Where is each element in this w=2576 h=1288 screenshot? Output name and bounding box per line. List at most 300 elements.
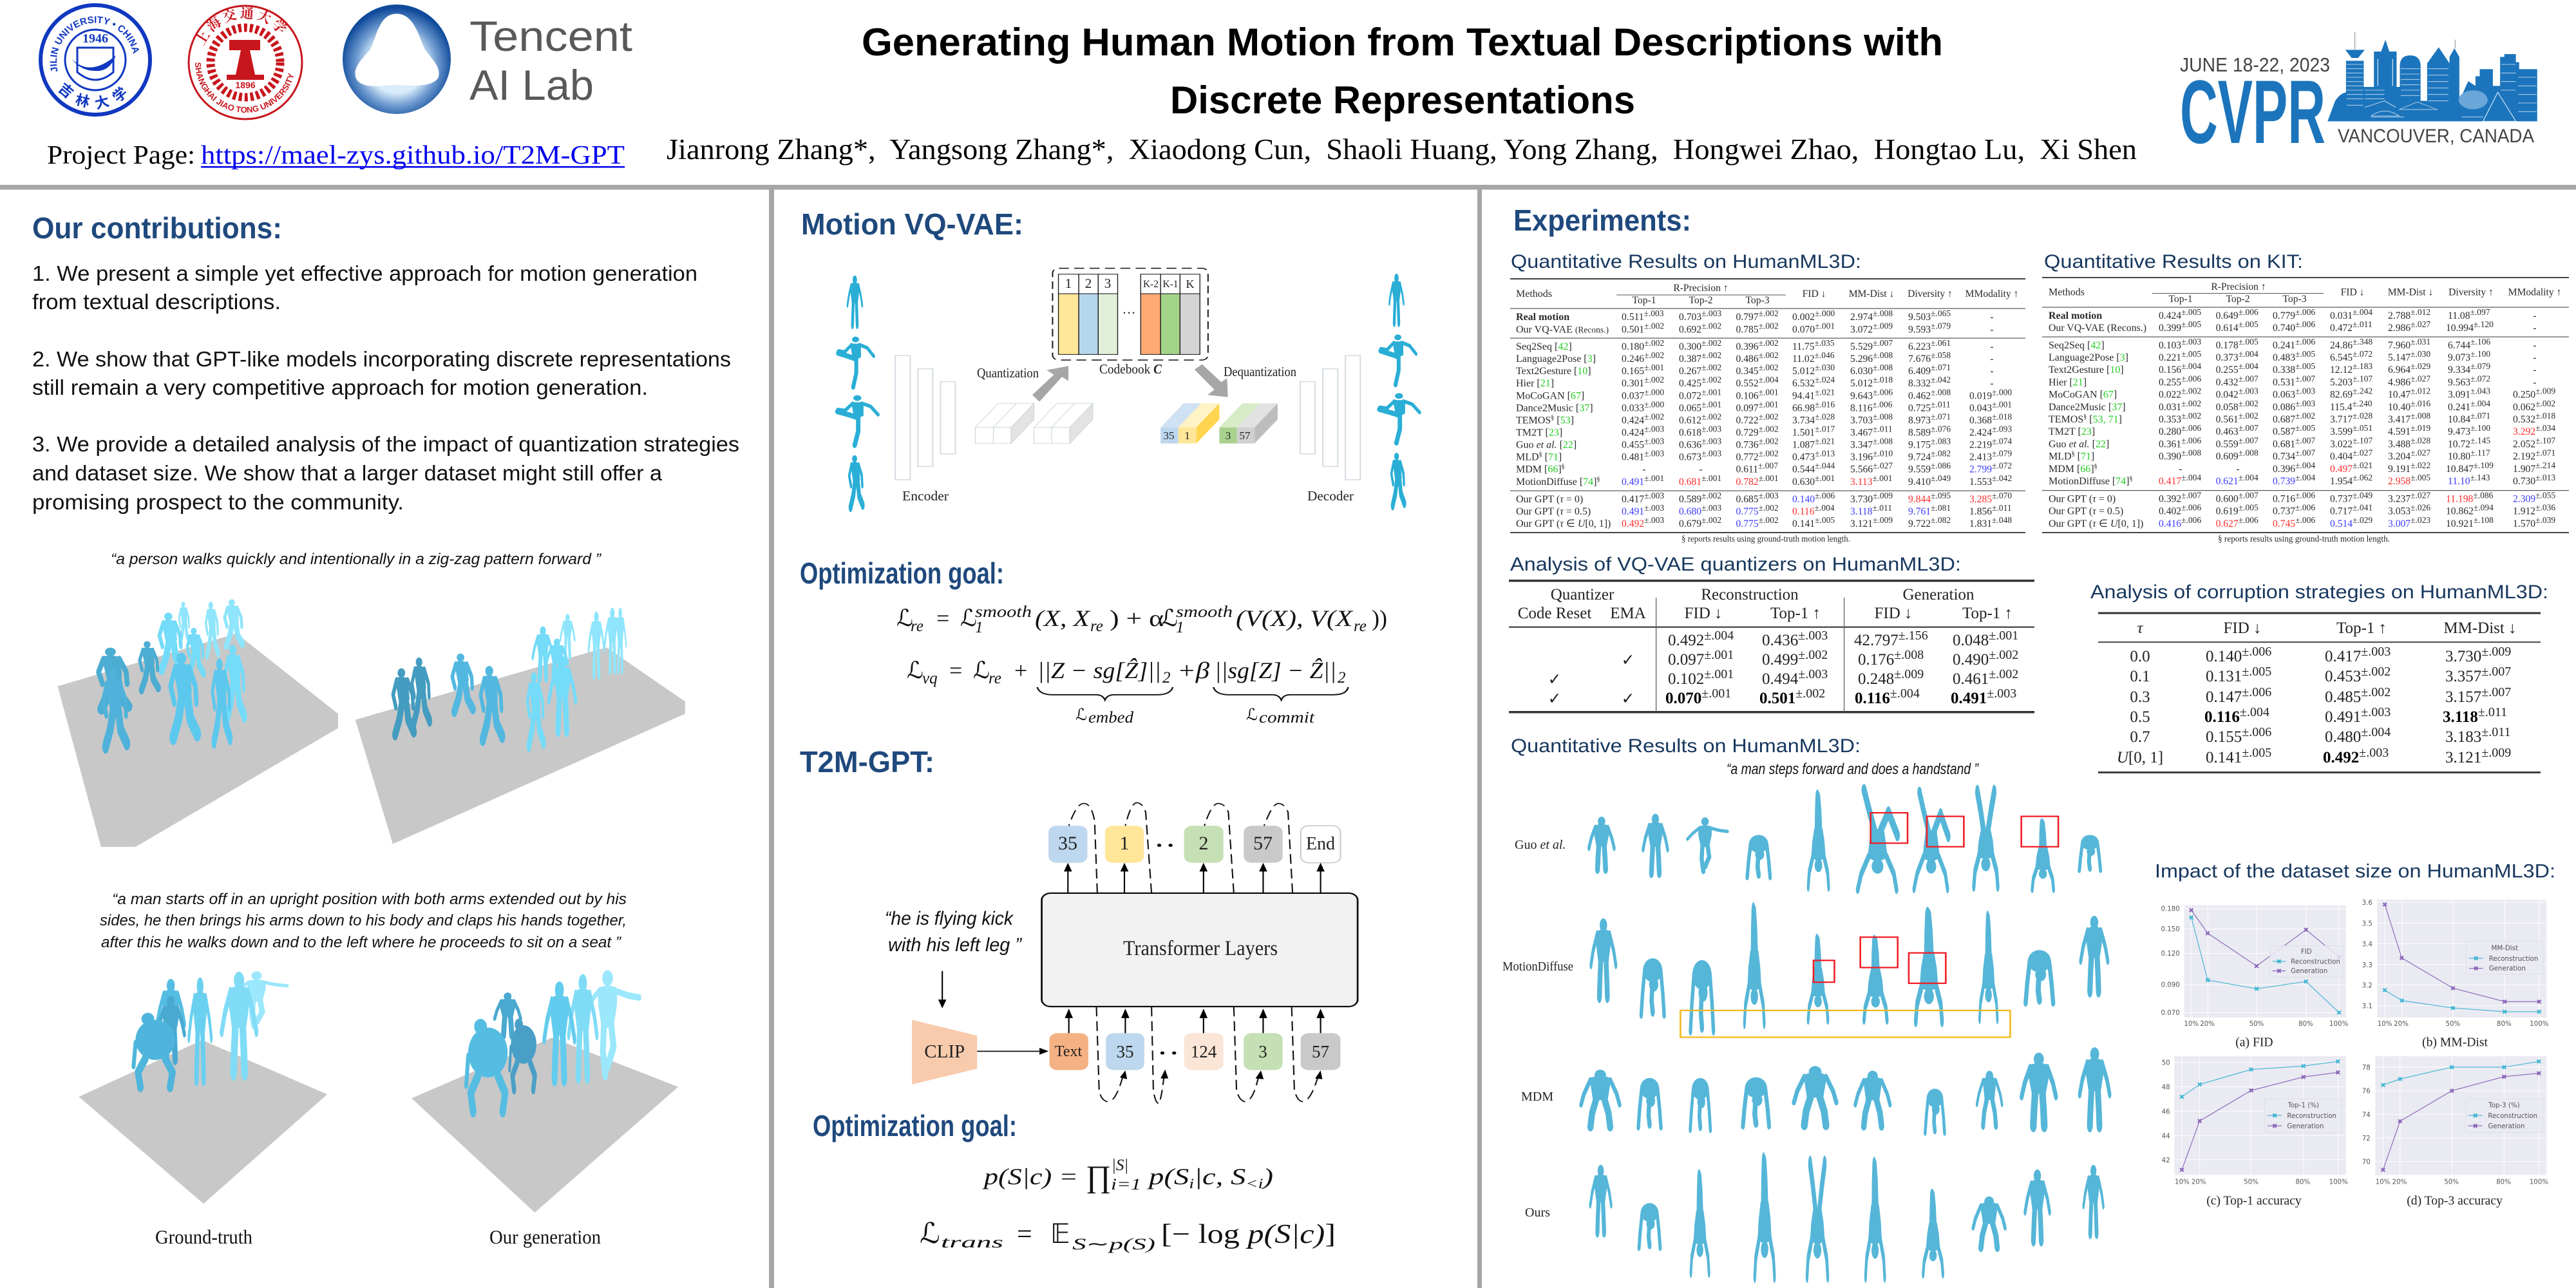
table: quantitative results kit: 0.627: [2216, 518, 2239, 529]
table: vq-vae quantizers: 42.797: [1854, 632, 1899, 649]
table: quantitative results kit: 0.353: [2159, 414, 2181, 425]
table: quantitative results kit: ±.006: [2181, 515, 2201, 525]
table: quantitative results humanml3d: Text2Gesture [10]: [1516, 366, 1591, 377]
equation: vq loss: ℒ: [1246, 706, 1258, 724]
chart: top-1 accuracy: [2162, 1056, 2348, 1208]
table: quantitative results kit: 0.361: [2159, 439, 2181, 450]
table: quantitative results kit: 0.031: [2330, 310, 2353, 321]
table: quantitative results kit: 71]: [2081, 451, 2094, 462]
text: contribution list: [32, 261, 739, 514]
table: quantitative results kit: §: [2129, 475, 2132, 482]
table: vq-vae quantizers: ✓: [1548, 689, 1561, 708]
table: quantitative results kit: 0.255: [2159, 377, 2181, 388]
chart: fid: 0.180: [2161, 905, 2180, 913]
table: quantitative results kit: 10.80: [2448, 451, 2470, 462]
table: quantitative results humanml3d: ±.018: [1873, 375, 1893, 384]
table: quantitative results kit: MotionDiffuse [74]: [2049, 476, 2129, 487]
equation: vq loss: ℒ: [1075, 706, 1087, 724]
table: quantitative results humanml3d: 0.246: [1622, 354, 1644, 365]
table: quantitative results kit: ±.086: [2473, 491, 2494, 500]
table: quantitative results kit: ±.097: [2470, 307, 2490, 317]
table: quantitative results humanml3d: -: [1990, 325, 1994, 335]
table: quantitative results humanml3d: 3.196: [1850, 452, 1873, 462]
logo: Jilin University: JILIN UNIVERSITY • CHINA: [50, 16, 139, 72]
chart: top-3 accuracy: Reconstruction: [2488, 1112, 2537, 1120]
table: quantitative results kit: 0.250: [2513, 389, 2535, 401]
table: quantitative results kit: 2.052: [2513, 439, 2535, 450]
table: quantitative results kit: 0.614: [2216, 323, 2239, 334]
table: quantitative results kit: ±.006: [2181, 502, 2201, 513]
table: quantitative results kit: 10.862: [2446, 506, 2474, 516]
table: quantitative results humanml3d: 0.722: [1736, 415, 1759, 426]
table: quantitative results kit: ±.006: [2295, 319, 2315, 329]
subheading: humanml3d table: Quantitative Results on HumanML3D:: [1511, 251, 1861, 272]
chart: top-3 accuracy: 100%: [2530, 1178, 2548, 1186]
table: quantitative results humanml3d: ±.003: [1701, 424, 1721, 434]
table: quantitative results humanml3d: ±.002: [1644, 350, 1664, 360]
table: quantitative results kit: ±.183: [2353, 361, 2372, 371]
table: quantitative results kit: 0.739: [2273, 476, 2295, 487]
row: ours: [1590, 1161, 2103, 1276]
table: quantitative results humanml3d: 0.072: [1679, 390, 1701, 402]
table: quantitative results humanml3d: 9.724: [1908, 452, 1931, 462]
table: quantitative results humanml3d: ±.001: [1759, 473, 1779, 483]
table: quantitative results humanml3d: Dance2Music [37]: [1516, 403, 1593, 413]
chart: top-1 accuracy: (c) Top-1 accuracy: [2206, 1193, 2302, 1208]
table: quantitative results humanml3d: R-Precision ↑: [1673, 283, 1728, 294]
table: quantitative results humanml3d: ±.003: [1644, 491, 1664, 500]
table: quantitative results kit: Diversity ↑: [2448, 287, 2494, 298]
equation: vq loss: ||sg[Z] − Ẑ||: [1215, 658, 1336, 683]
chart: top-1 accuracy: 10%: [2175, 1178, 2190, 1186]
equation: transformer loss: trans: [941, 1234, 1003, 1251]
chart: top-1 accuracy: Generation: [2287, 1122, 2324, 1130]
table: quantitative results kit: 7.960: [2388, 340, 2410, 351]
table: quantitative results kit: Our GPT (τ ∈ U[0, 1]): [2049, 518, 2143, 529]
table: quantitative results humanml3d: ±.002: [1759, 338, 1779, 348]
diagram labels: 2: [1085, 276, 1092, 291]
logo: Tencent AI Lab: Tencent: [469, 12, 632, 60]
table: quantitative results humanml3d: ±.003: [1644, 503, 1664, 513]
table: corruption strategies: 0.453: [2325, 668, 2361, 685]
table: quantitative results humanml3d: ±.002: [1759, 424, 1779, 434]
table: quantitative results kit: ±.019: [2410, 423, 2430, 433]
logo: CVPR 2023 Vancouver: JUNE 18-22, 2023: [2180, 53, 2330, 76]
table: vq-vae quantizers: 0.494: [1762, 670, 1798, 688]
table: quantitative results humanml3d: ±.006: [1873, 388, 1893, 397]
table: quantitative results humanml3d: ±.027: [1873, 461, 1893, 470]
table: quantitative results humanml3d: 2.974: [1850, 312, 1873, 323]
table: quantitative results humanml3d: 0.725: [1908, 403, 1931, 413]
table: quantitative results kit: Hier [21]: [2049, 377, 2087, 388]
chart: top-3 accuracy: 10%: [2376, 1178, 2391, 1186]
table: quantitative results kit: 2.958: [2388, 476, 2410, 487]
table: quantitative results humanml3d: §: [1596, 476, 1600, 483]
diagram text labels: 1: [1119, 833, 1130, 854]
equation: reconstruction loss: [896, 603, 1387, 636]
table: corruption strategies: 0.3: [2130, 688, 2150, 706]
chart: mm-dist: 80%: [2497, 1020, 2512, 1028]
table: quantitative results humanml3d: 0.300: [1679, 341, 1701, 352]
table: quantitative results kit: 0.416: [2159, 518, 2181, 529]
diagram labels: K-1: [1162, 279, 1179, 290]
table: quantitative results kit: 0.178: [2216, 340, 2239, 351]
table: quantitative results kit: ±.028: [2353, 411, 2372, 421]
table: quantitative results kit: ±.006: [2295, 491, 2315, 500]
table: quantitative results kit: ±.006: [2295, 337, 2315, 346]
table: quantitative results kit: ±.214: [2535, 460, 2555, 470]
table: quantitative results kit: 0.280: [2159, 426, 2181, 437]
table: quantitative results kit: Our GPT (τ = 0): [2049, 493, 2116, 505]
table: quantitative results kit: 9.073: [2448, 352, 2470, 363]
table: quantitative results humanml3d: ±.028: [1815, 412, 1835, 421]
table: corruption strategies: τ: [2137, 620, 2144, 637]
table: quantitative results kit: ±.006: [2295, 307, 2315, 317]
table: quantitative results kit: 0.373: [2216, 352, 2239, 363]
table: quantitative results kit: 0.086: [2273, 402, 2295, 413]
table: corruption strategies: 0.7: [2130, 728, 2150, 746]
equation: transformer loss: ℒ: [920, 1218, 940, 1249]
table: quantitative results kit: MModality ↑: [2508, 287, 2561, 298]
table: quantitative results kit: ±.006: [2239, 307, 2259, 317]
table: quantitative results kit: [: [2087, 414, 2093, 425]
table: quantitative results kit: ±.011: [2353, 319, 2372, 329]
table: quantitative results kit: ±.003: [2295, 386, 2315, 395]
table: quantitative results kit: ±.071: [2470, 411, 2490, 421]
table: quantitative results humanml3d: ±.046: [1815, 350, 1835, 360]
table: quantitative results kit: 0.404: [2330, 451, 2353, 462]
table: quantitative results humanml3d: MLD: [1516, 452, 1539, 462]
table: quantitative results humanml3d: ±.079: [1931, 321, 1951, 331]
table: quantitative results kit: ±.240: [2353, 399, 2372, 408]
table: quantitative results humanml3d: -: [1990, 366, 1994, 377]
table: quantitative results humanml3d: ±.009: [1873, 321, 1893, 331]
table: quantitative results humanml3d: ±.002: [1759, 308, 1779, 318]
table: quantitative results humanml3d: Methods: [1516, 289, 1552, 299]
table: quantitative results humanml3d: ±.002: [1644, 321, 1664, 331]
table: quantitative results kit: -: [2533, 323, 2537, 334]
table: quantitative results humanml3d: 5.296: [1850, 354, 1873, 365]
table: quantitative results humanml3d: -: [1990, 312, 1994, 323]
row: mdm: [1581, 1047, 2110, 1133]
table: quantitative results humanml3d: ±.002: [1701, 375, 1721, 384]
arrow: dequantization: [1195, 365, 1228, 397]
table: corruption strategies: ±.003: [2361, 705, 2391, 719]
chart: mm-dist: 3.4: [2362, 941, 2372, 949]
title: Generating Human Motion from Textual Descriptions with: [862, 21, 1943, 64]
table: quantitative results kit: ±.007: [2239, 423, 2259, 433]
row labels: MDM: [1521, 1090, 1553, 1104]
table: quantitative results kit: ±.079: [2470, 361, 2490, 371]
table: quantitative results humanml3d: 1.831: [1969, 518, 1992, 529]
table: quantitative results humanml3d: ±.005: [1815, 515, 1835, 525]
table: quantitative results kit: ±.005: [2410, 473, 2430, 482]
table: quantitative results humanml3d: 3.734: [1792, 415, 1815, 426]
diagram labels: K-2: [1143, 279, 1159, 290]
table: vq-vae quantizers: ✓: [1548, 670, 1561, 688]
table: quantitative results kit: 0.058: [2216, 402, 2239, 413]
table: quantitative results humanml3d: ±.011: [1873, 503, 1892, 513]
equation: sequence probability: |S|: [1112, 1157, 1128, 1174]
table: quantitative results kit: 0.730: [2513, 476, 2535, 487]
table: quantitative results kit: ±.026: [2410, 502, 2430, 513]
table: quantitative results humanml3d: 0.267: [1679, 366, 1701, 377]
table: quantitative results kit: Text2Gesture [10]: [2049, 365, 2124, 375]
table: quantitative results humanml3d: ±.001: [1759, 399, 1779, 410]
diagram text labels: 57: [1312, 1042, 1329, 1061]
quote: flying kick: “he is flying kick: [885, 908, 1014, 929]
table: quantitative results kit: ±.004: [2181, 473, 2201, 482]
table: corruption strategies: ±.002: [2361, 685, 2391, 699]
chart: top-1 accuracy: 46: [2162, 1108, 2170, 1115]
table: vq-vae quantizers: ±.004: [1890, 687, 1920, 701]
table: quantitative results kit: ±.100: [2470, 349, 2490, 359]
table: quantitative results humanml3d: ±.001: [1701, 399, 1721, 410]
table: corruption strategies: 0.0: [2130, 648, 2150, 665]
table: quantitative results humanml3d: ±.001: [1701, 473, 1721, 483]
table: quantitative results kit: ±.003: [2239, 386, 2259, 395]
table: quantitative results humanml3d: ±.093: [1992, 424, 2012, 434]
table: quantitative results kit: Seq2Seq [42]: [2049, 340, 2105, 351]
table: quantitative results kit: ±.027: [2353, 448, 2372, 457]
table: quantitative results humanml3d: 9.410: [1908, 477, 1931, 488]
table: quantitative results humanml3d: 0.180: [1622, 341, 1644, 352]
scene: zig-zag generation: [355, 608, 685, 844]
table: quantitative results humanml3d: 9.722: [1908, 518, 1931, 529]
table: quantitative results humanml3d: ±.006: [1815, 491, 1835, 500]
table: quantitative results kit: 9.473: [2448, 426, 2470, 437]
table: corruption strategies: 3.183: [2445, 728, 2481, 746]
table: quantitative results humanml3d: ±.004: [1815, 503, 1835, 513]
equation: reconstruction loss: 1: [975, 619, 983, 636]
chart: top-3 accuracy: 72: [2362, 1135, 2371, 1142]
table: quantitative results kit: 2.309: [2513, 493, 2535, 505]
diagram labels: 57: [1239, 430, 1251, 442]
table: quantitative results humanml3d: -: [1990, 378, 1994, 389]
table: quantitative results kit: -: [2179, 464, 2183, 475]
table: quantitative results humanml3d: ±.011: [1992, 503, 2012, 513]
table: quantitative results kit: 4.591: [2388, 426, 2410, 437]
subheading: dataset size: Impact of the dataset size on HumanML3D:: [2155, 860, 2555, 882]
equation: sequence probability: i: [1189, 1175, 1194, 1191]
chart: fid: 0.090: [2161, 981, 2180, 989]
table: corruption strategies: 3.121: [2445, 749, 2481, 766]
table: quantitative results kit: ±.051: [2353, 423, 2372, 433]
panel: t2m-gpt: [800, 745, 1358, 1253]
table: vq-vae quantizers: ±.001: [1704, 667, 1734, 681]
table: quantitative results humanml3d: ±.002: [1759, 437, 1779, 446]
table: quantitative results kit: 3.204: [2388, 451, 2410, 462]
diagram labels: K: [1186, 278, 1194, 290]
table: corruption strategies: 0.491: [2325, 708, 2361, 726]
table: quantitative results humanml3d: ±.021: [1815, 388, 1835, 397]
table: quantitative results humanml3d: 0.491: [1622, 477, 1644, 488]
table: quantitative results kit: ±.005: [2181, 319, 2201, 329]
table: quantitative results humanml3d: ±.002: [1701, 321, 1721, 331]
chart: top-3 accuracy: Top-3 (%): [2488, 1102, 2520, 1110]
table: quantitative results kit: ±.002: [2295, 411, 2315, 421]
diagram text labels: 57: [1253, 833, 1273, 854]
table: quantitative results kit: ±.007: [2295, 435, 2315, 446]
text: contribution list: still remain a very competitive approach for motion generation.: [32, 375, 648, 399]
equation: reconstruction loss: (X, X: [1035, 605, 1091, 631]
table: quantitative results humanml3d: ±.001: [1701, 388, 1721, 397]
table: quantitative results humanml3d: Our VQ-VAE (Recons.): [1516, 325, 1609, 335]
table: quantitative results humanml3d: ±.002: [1701, 363, 1721, 372]
chart: mm-dist: 20%: [2394, 1020, 2409, 1028]
table: quantitative results kit: 3.417: [2388, 414, 2410, 425]
table: quantitative results humanml3d: 0.097: [1736, 403, 1759, 413]
table: quantitative results humanml3d: ±.086: [1931, 461, 1951, 470]
table: quantitative results kit: ±.006: [2295, 515, 2315, 525]
diagram text labels: 35: [1058, 833, 1077, 854]
text: contribution list: 1. We present a simple yet effective approach for motion generation: [32, 261, 697, 285]
table: quantitative results kit: ±.029: [2353, 515, 2372, 525]
table: quantitative results humanml3d: 9.643: [1850, 390, 1873, 402]
table: quantitative results kit: 11.08: [2448, 310, 2470, 321]
table: quantitative results humanml3d: 11.75: [1792, 341, 1815, 352]
table: corruption strategies: [2098, 612, 2541, 773]
table: vq-vae quantizers: [1509, 580, 2034, 714]
table: quantitative results humanml3d: 0.140: [1792, 494, 1815, 505]
equation: vq loss: vq: [922, 670, 938, 687]
table: quantitative results kit: 0.399: [2159, 323, 2181, 334]
table: quantitative results humanml3d: §: [1562, 464, 1565, 470]
equation: transformer loss: S∼p(S): [1072, 1236, 1155, 1253]
table: quantitative results humanml3d: -: [1642, 464, 1646, 475]
table: quantitative results humanml3d: 0.019: [1969, 390, 1992, 402]
table: quantitative results humanml3d: 3.121: [1850, 518, 1873, 529]
highlight boxes: [1680, 813, 2058, 1037]
table: quantitative results humanml3d: 7.676: [1908, 354, 1931, 365]
table: quantitative results humanml3d: ±.009: [1873, 515, 1893, 525]
table: quantitative results kit: ±.030: [2410, 349, 2430, 359]
table: vq-vae quantizers: 0.248: [1858, 670, 1894, 688]
chart: top-3 accuracy: 74: [2362, 1111, 2371, 1119]
table: quantitative results kit: ±.109: [2474, 460, 2494, 470]
table: vq-vae quantizers: ✓: [1622, 689, 1634, 708]
table: quantitative results humanml3d: 0.797: [1736, 312, 1759, 323]
equation: vq loss: +: [1014, 658, 1027, 683]
logo: CVPR 2023 Vancouver: CVPR: [2180, 61, 2325, 162]
table: corruption strategies: ±.011: [2478, 705, 2507, 719]
table: corruption strategies: 0.131: [2206, 668, 2242, 685]
table: quantitative results humanml3d: ±.000: [1815, 308, 1835, 318]
table: quantitative results humanml3d: 3.118: [1850, 506, 1873, 517]
table: quantitative results humanml3d: 5.529: [1850, 341, 1873, 352]
equation: sequence probability: ): [1262, 1164, 1273, 1189]
table: vq-vae quantizers: ±.001: [1704, 648, 1734, 662]
table: vq-vae quantizers: FID ↓: [1874, 605, 1913, 622]
table: quantitative results kit: ±.041: [2353, 502, 2372, 513]
equation: reconstruction loss: smooth: [975, 603, 1032, 621]
chart: fid: 20%: [2200, 1020, 2215, 1028]
table: vq-vae quantizers: Reconstruction: [1701, 586, 1799, 603]
table: quantitative results kit: 0.241: [2448, 402, 2470, 413]
chart: top-3 accuracy: 50%: [2444, 1178, 2459, 1186]
table: quantitative results kit: ±.117: [2470, 448, 2490, 457]
table: vq-vae quantizers: 0.490: [1953, 651, 1989, 668]
table: vq-vae quantizers: ±.001: [1701, 687, 1731, 701]
table: quantitative results humanml3d: ±.095: [1931, 491, 1951, 500]
table: quantitative results humanml3d: 0.775: [1736, 506, 1759, 517]
figures: reconstructed motion: [1379, 274, 1419, 506]
chart: fid: 10%: [2184, 1020, 2199, 1028]
table: quantitative results kit: 0.022: [2159, 389, 2181, 401]
chart: fid: FID: [2301, 948, 2312, 956]
table: quantitative results humanml3d: ±.001: [1992, 399, 2012, 410]
table: quantitative results humanml3d: ±.008: [1873, 363, 1893, 372]
table: quantitative results kit: 0.497: [2330, 464, 2353, 475]
table: quantitative results kit: 3.599: [2330, 426, 2353, 437]
table: quantitative results kit: 3.091: [2448, 389, 2470, 401]
chart: mm-dist: 3.6: [2362, 899, 2372, 907]
table: quantitative results kit: 0.390: [2159, 451, 2181, 462]
equation: reconstruction loss: re: [911, 618, 923, 635]
table: quantitative results humanml3d: ±.011: [1931, 399, 1951, 410]
table: quantitative results kit: 0.483: [2273, 352, 2295, 363]
table: vq-vae quantizers: 0.070: [1665, 690, 1701, 707]
table: quantitative results kit: 6.545: [2330, 352, 2353, 363]
table: corruption strategies: ±.005: [2242, 746, 2271, 760]
equation: vq loss: commit: [1259, 709, 1315, 726]
chart: mm-dist: 3.2: [2362, 981, 2372, 989]
table: quantitative results humanml3d: 0.636: [1679, 439, 1701, 451]
table: quantitative results kit: 115.4: [2330, 402, 2353, 413]
table: corruption strategies: FID ↓: [2223, 620, 2262, 637]
table: quantitative results humanml3d: Language2Pose [3]: [1516, 354, 1596, 365]
table: corruption strategies: ±.009: [2481, 645, 2511, 659]
table: quantitative results kit: 11.198: [2446, 493, 2474, 505]
table: quantitative results humanml3d: 0.417: [1622, 494, 1644, 505]
table: quantitative results humanml3d: 0.425: [1679, 378, 1701, 389]
table: corruption strategies: ±.006: [2242, 725, 2271, 739]
diagram labels: Codebook C: [1099, 361, 1162, 377]
table: quantitative results humanml3d: ±.011: [1873, 424, 1893, 434]
table: corruption strategies: 0.485: [2325, 688, 2361, 706]
equation: transformer loss: [920, 1218, 1336, 1253]
table: quantitative results humanml3d: 5.566: [1850, 464, 1873, 475]
quote: sit on seat: “a man starts off in an upright position with both arms extended out by his: [112, 891, 627, 908]
table: quantitative results kit: -: [2533, 310, 2537, 321]
table: quantitative results humanml3d: 0.785: [1736, 325, 1759, 335]
table: quantitative results kit: ±.145: [2470, 435, 2490, 446]
charts: dataset size impact: [2161, 899, 2549, 1208]
table: vq-vae quantizers: Generation: [1902, 586, 1975, 603]
logo: Shanghai Jiao Tong University: [188, 5, 303, 120]
equation: reconstruction loss: smooth: [1176, 603, 1233, 621]
table: quantitative results humanml3d: 0.685: [1736, 494, 1759, 505]
table: quantitative results humanml3d: [1510, 278, 2025, 544]
table: quantitative results kit: 3.717: [2330, 414, 2353, 425]
equation: vq loss: ||Z − sg[Ẑ]||: [1037, 658, 1161, 683]
table: vq-vae quantizers: 0.461: [1953, 670, 1989, 688]
figures: input motion: [837, 276, 878, 507]
table: quantitative results humanml3d: ±.002: [1759, 515, 1779, 525]
caption: ground-truth: Ground-truth: [155, 1226, 252, 1248]
table: quantitative results kit: ±.034: [2535, 423, 2555, 433]
table: quantitative results humanml3d: 0.782: [1736, 477, 1759, 488]
table: quantitative results kit: 9.563: [2448, 377, 2470, 388]
table: quantitative results kit: TEMOS: [2049, 414, 2083, 425]
table: quantitative results kit: 6.744: [2448, 340, 2470, 351]
table: quantitative results humanml3d: ±.002: [1701, 350, 1721, 360]
table: quantitative results kit: 0.031: [2159, 402, 2181, 413]
heading: contributions: Our contributions:: [32, 211, 282, 245]
table: quantitative results kit: 0.687: [2273, 414, 2295, 425]
table: quantitative results humanml3d: -: [1699, 464, 1703, 475]
table: quantitative results kit: 53, 71]: [2093, 414, 2122, 425]
